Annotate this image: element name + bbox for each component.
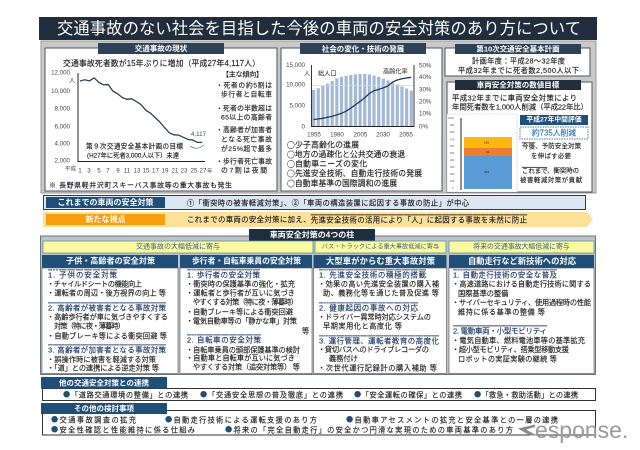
list: social changes: ○自動車基準の国際調和の進展 <box>287 178 397 189</box>
line chart: traffic deaths: 第９次交通安全基本計画の目標 <box>86 142 183 150</box>
column: heavy vehicles: 助、義務化等を通じた普及促進 等 <box>323 288 439 298</box>
stacked bar chart: reduction: 200 <box>450 172 455 176</box>
column: heavy vehicles <box>314 255 446 374</box>
column: children and elderly: ・「道」との連携による逆走対策 等 <box>47 364 159 372</box>
line chart: traffic deaths: 15 <box>143 168 150 174</box>
column: pedestrians and cyclists: ・電気自動車等の「静かな車」対策 <box>186 316 297 326</box>
list: cooperation items: ●「道路交通環境の整備」との連携 <box>63 390 188 400</box>
column: children and elderly: ・高齢歩行者が車に気づきやすくする <box>47 312 168 322</box>
column: pedestrians and cyclists: ・自動ブレーキ等による衝突回避 <box>186 308 293 316</box>
column: new technology: 1. 自動走行技術の安全な普及 <box>453 270 558 280</box>
text: plan period and target <box>458 56 579 75</box>
column: pedestrians and cyclists: やすくする対策（追突対策等） 等 <box>193 362 300 372</box>
stacked bar chart: reduction: 454 <box>484 170 489 174</box>
column: children and elderly <box>42 255 178 374</box>
text: target statement: 年間死者数を1,000人削減（平成22年比） <box>452 102 588 112</box>
text: evaluation notes: 今後、予防安全対策 <box>522 141 582 150</box>
callout: mid-term evaluation: 約735人削減 <box>532 128 576 138</box>
text: evaluation notes: を伸ばす必要 <box>531 151 572 160</box>
column: children and elderly: 子供・高齢者の安全対策 <box>66 256 155 266</box>
list: social changes: ○地方の過疎化と公共交通の衰退 <box>287 149 405 160</box>
column: pedestrians and cyclists: やすくする対策（特に夜・薄暮時） <box>193 298 298 306</box>
combo chart: population and ageing rate: 0 <box>302 124 306 130</box>
list: social changes: ○少子高齢化の進展 <box>287 140 359 150</box>
column: pedestrians and cyclists: ・運転者と歩行者が互いに気づき <box>186 288 295 298</box>
column: heavy vehicles: 早期実用化と高度化 等 <box>323 322 402 330</box>
panel: top section background <box>41 41 596 193</box>
column: pedestrians and cyclists: 2. 自転車の安全対策 <box>187 334 262 344</box>
heading: cooperation <box>41 377 167 388</box>
text block: main trends: ・高齢者が加害者 <box>216 125 272 134</box>
combo chart: population and ageing rate: 1980 <box>330 132 344 138</box>
stacked bar chart: reduction: 100 <box>450 179 455 183</box>
column: pedestrians and cyclists: ・衝突時の保護基準の強化・拡充 <box>186 280 295 288</box>
callout: mid-term evaluation: 平成27年中間評価 <box>526 114 582 124</box>
line chart: traffic deaths: 11 <box>124 168 131 174</box>
heading: other considerations: その他の検討事項 <box>74 403 134 413</box>
yellow band: bus and truck: バス・トラックによる重大事故低減に寄与 <box>322 242 439 250</box>
banner: existing vehicle safety measures: これまでの車両の安全対策 <box>58 197 154 207</box>
line chart: traffic deaths: 4,117 <box>191 131 207 138</box>
line chart: traffic deaths: 7 <box>106 168 110 174</box>
heading: four pillars <box>249 229 375 241</box>
panel: four pillars <box>40 229 596 374</box>
line chart: traffic deaths: 13 <box>134 168 141 174</box>
text: target statement <box>452 94 588 112</box>
combo chart: population and ageing rate: 10,000 <box>286 82 306 88</box>
line chart: traffic deaths: (H27年に死者3,000人以下）未達 <box>87 150 180 160</box>
column: heavy vehicles: 1. 先進安全技術の積極的搭載 <box>319 270 426 280</box>
column: heavy vehicles: ・ドライバー異常時対応システムの <box>318 312 431 322</box>
column: children and elderly: 対策（特に夜・薄暮時） <box>54 322 125 330</box>
column: pedestrians and cyclists: 1. 歩行者の安全対策 <box>187 270 260 280</box>
list: cooperation items <box>63 390 578 400</box>
heading: numeric target <box>455 80 581 90</box>
line chart: traffic deaths: 27 <box>200 168 207 174</box>
text: evaluation notes <box>520 141 583 184</box>
list: other items: ●安全性確認と性能維持に係る仕組み <box>51 425 195 435</box>
line chart: traffic deaths: 3 <box>87 168 91 174</box>
panel: current state of traffic accidents <box>45 43 277 191</box>
column: pedestrians and cyclists <box>180 255 312 374</box>
text: evaluation notes: これまで、衝突時の <box>522 166 579 174</box>
line chart: traffic deaths: 1 <box>78 168 82 174</box>
column: heavy vehicles: 2. 健康起因の事故への対応 <box>319 302 418 312</box>
list: cooperation items: ●「交通安全思想の普及徹底」との連携 <box>200 390 343 400</box>
list: other items <box>51 415 558 435</box>
column: new technology: ・超小型モビリティ、搭乗型移動支援 <box>452 345 569 354</box>
heading: 10th basic plan <box>455 44 581 54</box>
column: children and elderly: 1. 子供の安全対策 <box>48 270 118 280</box>
column: heavy vehicles: 3. 運行管理、運転者教育の高度化 <box>319 336 440 346</box>
line chart: traffic deaths: 9 <box>116 168 120 174</box>
stacked bar chart: reduction: 900 <box>450 123 455 127</box>
heading: current state <box>98 43 224 54</box>
list: other items: ●自動車アセスメントの拡充と安全基準との一層の連携 <box>346 415 558 425</box>
line chart: traffic deaths: 10,000 <box>51 88 71 95</box>
line chart: traffic deaths: 23 <box>181 168 188 174</box>
heading: other considerations <box>41 403 167 414</box>
combo chart: population and ageing rate: 2005 <box>354 132 368 138</box>
column: new technology: ・電気自動車、燃料電池車等の基準拡充 <box>452 336 585 345</box>
combo chart: population and ageing rate: 人 <box>304 70 311 78</box>
panel: social change and technology <box>281 43 442 191</box>
yellow band: bus and truck <box>315 241 446 253</box>
combo chart: population and ageing rate: 1955 <box>307 132 321 138</box>
column: new technology <box>449 255 594 374</box>
column: pedestrians and cyclists: ・自転車乗員の頭部保護基準の検討 <box>186 346 300 354</box>
heading: current state: 交通事故の現状 <box>135 43 188 53</box>
column: children and elderly: ・自動ブレーキ等による衝突回避 等 <box>47 332 167 340</box>
column: heavy vehicles: 義務付け <box>329 354 358 363</box>
column: new technology: ・サイバーセキュリティ、使用過程時の性能 <box>452 298 591 307</box>
line chart: traffic deaths <box>51 70 213 175</box>
stacked bar chart: reduction: 91 <box>486 150 490 154</box>
line chart: traffic deaths: 12,000 <box>51 70 71 76</box>
arrow banner: new perspective: 新たな視点 <box>86 214 126 224</box>
column: heavy vehicles: ・次世代運行記録計の購入補助 等 <box>318 364 437 372</box>
line chart: traffic deaths: 人 <box>69 78 76 84</box>
column: heavy vehicles: ・貸切バスへのドライブレコーダの <box>318 345 429 354</box>
line chart: traffic deaths: 8,000 <box>55 106 71 112</box>
text block: main trends: ・死者の半数超は <box>216 104 272 112</box>
combo chart: population and ageing rate: 15,000 <box>286 62 306 69</box>
list: other items: ●将来の「完全自動走行」の安全かつ円滑な実現のための車両基準のあり方 <box>225 425 513 435</box>
line chart: traffic deaths: 平成 <box>65 164 77 172</box>
stacked bar chart: reduction: 0 <box>452 186 454 190</box>
yellow band: future: 将来の交通事故大幅低減に寄与 <box>473 242 570 250</box>
column: new technology: 2. 電動車両・小型モビリティ <box>453 326 547 336</box>
line chart: traffic deaths: 年 <box>207 167 213 175</box>
combo chart: population and ageing rate: 高齢化率 <box>383 68 408 76</box>
column: pedestrians and cyclists: 歩行者・自転車乗員の安全対策 <box>192 256 301 266</box>
combo chart: population and ageing rate: 40% <box>419 74 432 81</box>
line chart: traffic deaths: 5 <box>97 168 101 174</box>
combo chart: population and ageing rate: 2055 <box>399 132 413 138</box>
heading: cooperation: 他の交通安全対策との連携 <box>59 378 149 388</box>
column: pedestrians and cyclists: 等 <box>302 326 309 336</box>
column: children and elderly: 3. 高齢者が加害者となる事故対策 <box>48 344 166 354</box>
title: 交通事故のない社会を目指した今後の車両の安全対策のあり方について <box>57 20 581 38</box>
column: pedestrians and cyclists: ・自動車と自転車が互いに気づき <box>186 354 295 362</box>
panel: cooperation with other measures <box>41 377 596 400</box>
line chart: traffic deaths: 21 <box>172 168 179 174</box>
line chart: traffic deaths: 19 <box>162 168 169 174</box>
list: other items: ●交通事故調査の拡充 <box>51 415 136 425</box>
text block: main trends: 65以上の高齢者 <box>221 112 272 122</box>
stacked bar chart: reduction: 600 <box>450 144 455 148</box>
stacked bar chart: reduction: 700 <box>450 138 455 142</box>
column: children and elderly: ・チャイルドシートの機能向上 <box>47 280 142 288</box>
column: children and elderly: ・誤操作時に被害を軽減する対策 <box>47 355 156 364</box>
combo chart: population and ageing rate: 総人口 <box>318 70 337 78</box>
stacked bar chart: reduction <box>447 114 517 192</box>
column: children and elderly: ・運転者の周辺・後方視界の向上 等 <box>47 288 166 298</box>
text block: main trends: 歩行者と自転車 <box>221 90 272 98</box>
yellow band: large reduction: 交通事故の大幅低減に寄与 <box>136 242 220 250</box>
combo chart: population and ageing rate: 30% <box>419 86 432 94</box>
heading: social change <box>300 43 426 54</box>
combo chart: population and ageing rate: 5,000 <box>290 102 306 110</box>
column: new technology: ロボットの実証実験の継続 等 <box>458 354 557 364</box>
logo: response watermark: esponse. <box>535 417 628 443</box>
combo chart: population and ageing rate: 50% <box>419 62 432 70</box>
list: social changes: ○自動車ニーズの変化 <box>287 158 367 170</box>
banner: existing vehicle safety measures <box>44 196 586 210</box>
text block: main trends: ・死者の約5割は <box>216 80 272 90</box>
text: target statement: 平成32年までに車両安全対策により <box>452 94 577 102</box>
yellow band: future <box>449 241 594 253</box>
combo chart: population and ageing rate: 10% <box>419 110 432 118</box>
arrow banner: new perspective: これまでの車両の安全対策に加え、先進安全技術の活用により「人」に起因する事故を未然に防止 <box>187 215 527 224</box>
yellow band: large reduction <box>43 241 313 253</box>
stacked bar chart: reduction: 300 <box>450 165 455 169</box>
text block: main trends: 【主な傾向】 <box>222 70 263 78</box>
column: new technology: 国際基準の整備 <box>458 289 508 298</box>
text block: main trends: が25%超で最多 <box>221 144 272 153</box>
list: other items: ●自動走行技術による運転支援のあり方 <box>165 415 317 425</box>
list: cooperation items: ●「安全運転の確保」との連携 <box>354 390 462 400</box>
list: social changes: ○先進安全技術、自動走行技術の発展 <box>287 168 422 179</box>
stacked bar chart: reduction: 400 <box>450 158 455 162</box>
list: cooperation items: ●「救急・救助活動」との連携 <box>474 390 578 400</box>
heading: social change: 社会の変化・技術の発展 <box>322 44 405 54</box>
line chart: traffic deaths: 4,000 <box>55 140 71 148</box>
panel: 10th basic plan <box>445 44 590 76</box>
combo chart: population and ageing rate <box>286 62 432 138</box>
text: plan period and target: 計画年度：平成28～32年度 <box>472 56 565 66</box>
text block: main trends: の7割は夜間 <box>221 166 267 174</box>
callout: mid-term evaluation <box>520 114 588 139</box>
stacked bar chart: reduction: 500 <box>450 151 455 155</box>
column: new technology: ・高速道路における自動走行技術に関する <box>452 280 591 288</box>
text: evaluation notes: 被害軽減対策が貢献 <box>520 175 583 184</box>
heading: numeric target: 車両安全対策の数値目標 <box>477 80 560 90</box>
line chart: traffic deaths: 17 <box>152 168 159 174</box>
heading: four pillars: 車両安全対策の4つの柱 <box>270 230 354 240</box>
column: children and elderly: 2. 高齢者が被害者となる事故対策 <box>48 302 166 312</box>
stacked bar chart: reduction: 800 <box>450 130 455 134</box>
text block: main trends: となる死亡事故 <box>221 134 272 144</box>
banner: existing vehicle safety measures: ①「衝突時の被害軽減対策」、②「車両の構造装置に起因する事故の防止」が中心 <box>187 198 470 208</box>
heading: 10th basic plan: 第10次交通安全基本計画 <box>476 44 560 54</box>
column: heavy vehicles: 大型車がからむ重大事故対策 <box>326 256 436 266</box>
line chart: traffic deaths: 6,000 <box>55 124 71 130</box>
arrow banner: new perspective <box>43 212 593 227</box>
combo chart: population and ageing rate: 0% <box>419 124 428 130</box>
combo chart: population and ageing rate: 2030 <box>376 132 390 138</box>
panel: numeric target <box>447 80 592 192</box>
line chart: traffic deaths: 25 <box>191 168 198 174</box>
column: new technology: 維持に係る基準の整備 等 <box>458 308 545 316</box>
note: ski bus accident: ※ 長野県軽井沢町スキーバス事故等の重大事故も発生 <box>49 180 232 190</box>
stacked bar chart: reduction: 1000 <box>448 116 454 120</box>
column: new technology: 自動走行など新技術への対応 <box>468 256 577 266</box>
text: plan period and target: 平成32年までに死者数2,500人以下 <box>458 66 579 75</box>
list: social changes <box>287 140 422 189</box>
text block: main trends <box>216 70 272 174</box>
stacked bar chart: reduction: 165 <box>484 140 489 144</box>
chart headline: 交通事故死者数が15年ぶりに増加（平成27年4,117人） <box>63 58 260 68</box>
text block: main trends: ・歩行者死亡事故 <box>216 156 272 166</box>
panel: other considerations <box>41 403 596 435</box>
combo chart: population and ageing rate: 20% <box>419 98 432 106</box>
column: heavy vehicles: ・効果の高い先進安全装置の購入補 <box>318 280 439 288</box>
line chart: traffic deaths: 2,000 <box>55 158 71 164</box>
